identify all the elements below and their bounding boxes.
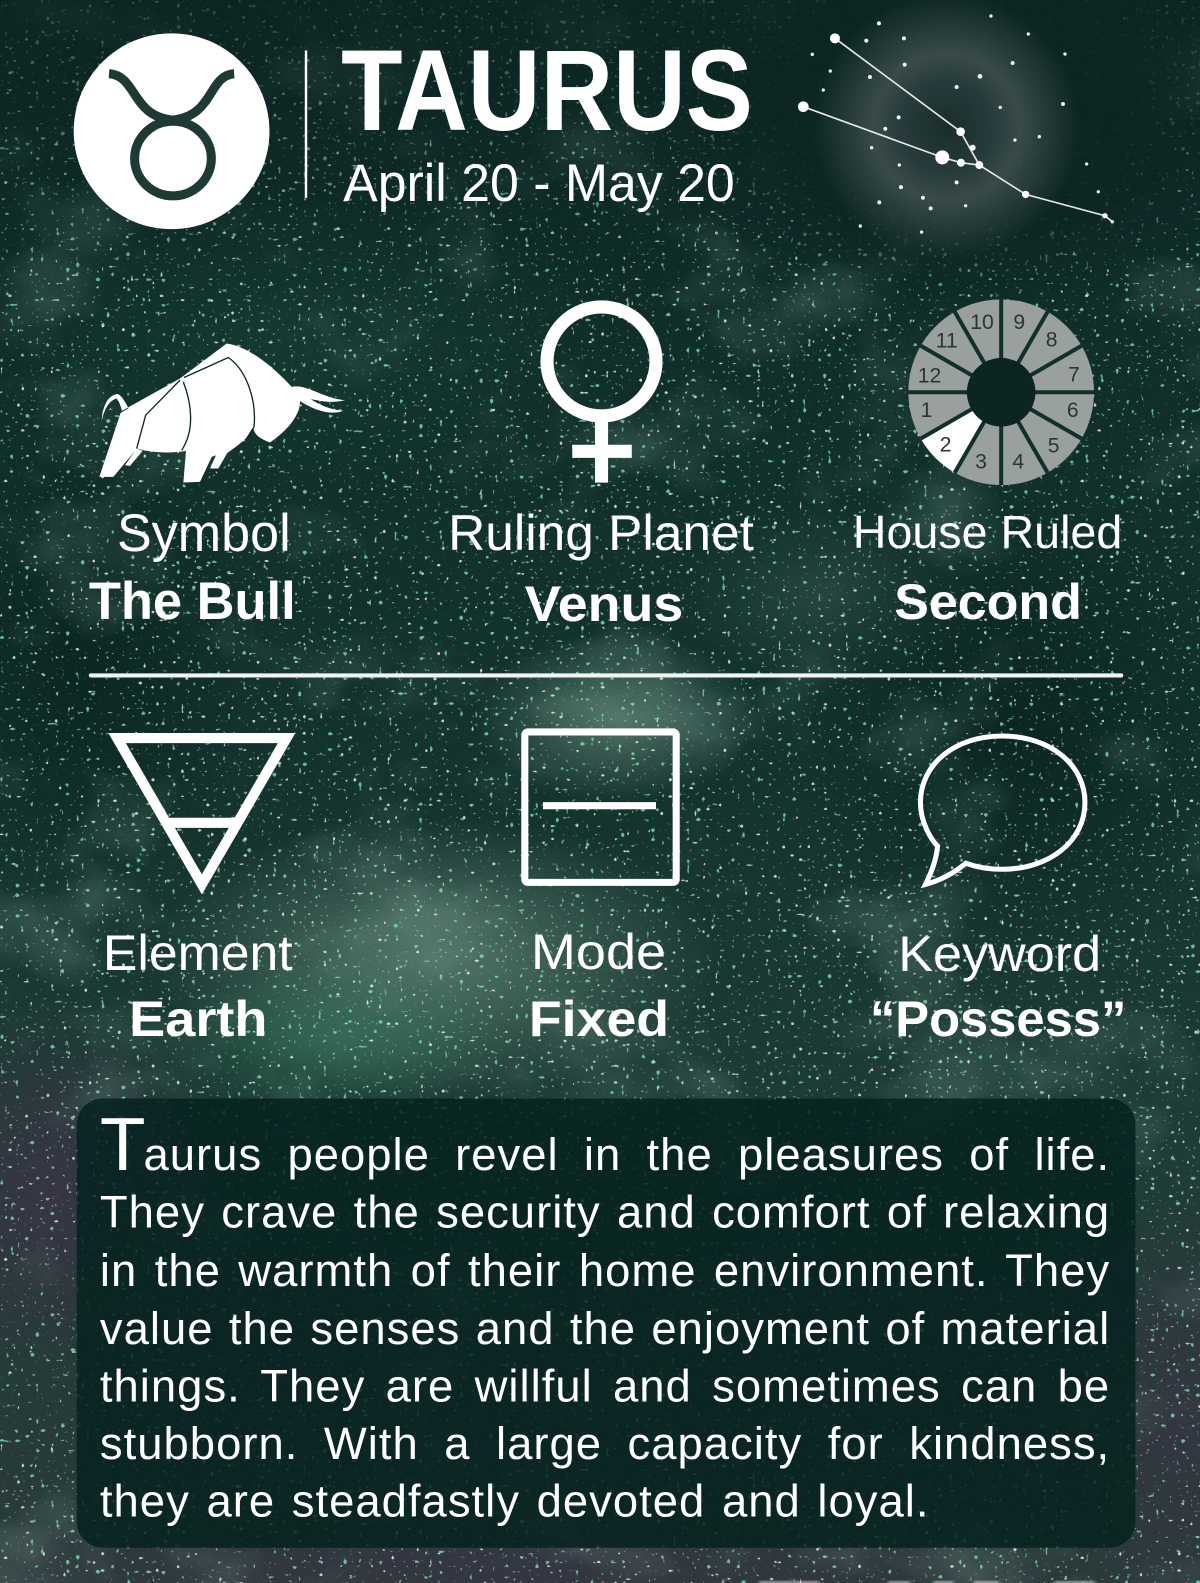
constellation: Taurus with nebula glow xyxy=(666,0,1200,303)
icon: Venus xyxy=(547,307,656,483)
panel: description text xyxy=(77,1098,1135,1548)
label: Element Earth: Element xyxy=(103,924,293,981)
label: Symbol The Bull xyxy=(89,504,296,631)
label: Ruling Planet Venus: Venus xyxy=(525,575,683,632)
icon: bull xyxy=(99,343,345,483)
icon: house wheel: 12 xyxy=(918,365,941,388)
icon: house wheel: 4 xyxy=(1012,450,1024,473)
icon: house wheel: 2 xyxy=(940,433,952,456)
panel: description text: Taurus people revel in the pleasures of life. xyxy=(100,1102,1110,1186)
icon: house wheel: 3 xyxy=(975,450,987,473)
label: Mode Fixed xyxy=(529,923,669,1047)
icon: house wheel: 11 xyxy=(936,329,958,352)
icon: speech bubble xyxy=(920,736,1085,884)
label: House Ruled Second: Second xyxy=(894,573,1082,630)
label: House Ruled Second xyxy=(853,506,1122,630)
label: Ruling Planet Venus xyxy=(448,504,754,632)
icon: house wheel: 10 xyxy=(970,311,994,334)
icon: house wheel: 9 xyxy=(1013,311,1025,334)
panel: description text: They crave the security and comfort of relaxing xyxy=(100,1186,1110,1238)
icon: fixed mode xyxy=(525,732,676,882)
panel: description text: things. They are willful and sometimes can be xyxy=(100,1360,1110,1411)
panel: description text: stubborn. With a large capacity for kindness, xyxy=(100,1417,1110,1469)
icon: Taurus zodiac badge xyxy=(74,33,269,229)
label: Symbol The Bull: The Bull xyxy=(89,572,296,631)
icon: earth element xyxy=(117,738,287,884)
panel: description text: they are steadfastly devoted and loyal. xyxy=(100,1475,930,1527)
icon: house wheel: 1 xyxy=(921,399,932,422)
label: Keyword Possess: Keyword xyxy=(898,925,1101,982)
icon: house wheel: 8 xyxy=(1046,328,1058,351)
panel: description text: in the warmth of their home environment. They xyxy=(100,1245,1110,1296)
icon: house wheel: 5 xyxy=(1048,434,1060,457)
label: Keyword Possess xyxy=(870,925,1126,1047)
label: Symbol The Bull: Symbol xyxy=(117,504,291,563)
label: Element Earth xyxy=(103,924,293,1047)
date range: April 20 - May 20 xyxy=(343,154,735,213)
label: Mode Fixed: Mode xyxy=(531,923,666,980)
icon: house wheel: 6 xyxy=(1067,399,1079,422)
title: TAURUS xyxy=(341,27,753,155)
label: Element Earth: Earth xyxy=(129,990,267,1047)
label: Ruling Planet Venus: Ruling Planet xyxy=(448,504,754,561)
header divider xyxy=(305,50,307,198)
label: Keyword Possess: “Possess” xyxy=(870,990,1126,1047)
section divider xyxy=(89,673,1123,677)
label: Mode Fixed: Fixed xyxy=(529,990,669,1047)
label: House Ruled Second: House Ruled xyxy=(853,506,1122,558)
icon: house wheel: 7 xyxy=(1068,364,1080,387)
icon: house wheel xyxy=(908,299,1094,485)
panel: description text: value the senses and the enjoyment of material xyxy=(100,1302,1110,1354)
